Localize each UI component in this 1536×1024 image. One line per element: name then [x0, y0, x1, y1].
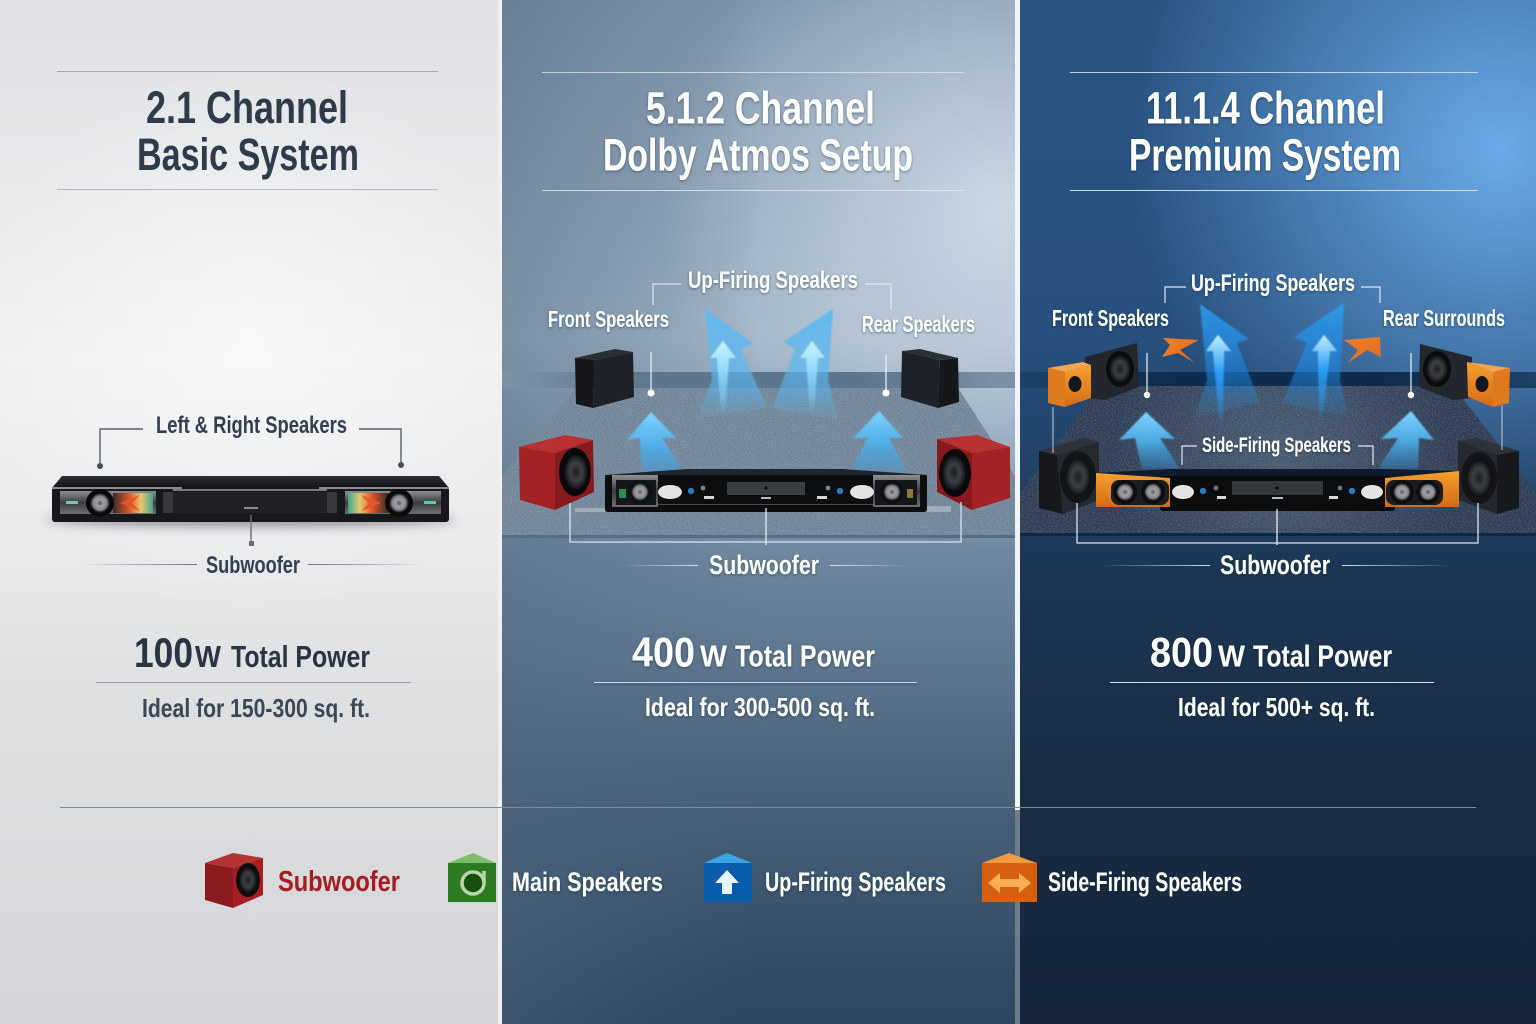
heading: 5.1.2 channel dolby atmos setup: Dolby Atmos Setup — [603, 130, 913, 180]
callout: subwoofer — [1077, 503, 1478, 580]
soundbar: 11.1.4 channel — [1096, 469, 1459, 511]
room floor — [1020, 372, 1536, 536]
legend item: main speakers — [448, 853, 663, 902]
callout: up-firing speakers — [1165, 270, 1380, 303]
stat: 100W total power — [96, 629, 411, 682]
heading: 11.1.4 channel premium system — [1129, 82, 1401, 180]
callout: subwoofer: Subwoofer — [206, 552, 300, 579]
callout: up-firing speakers — [653, 267, 891, 310]
subwoofer: left red — [519, 435, 594, 510]
callout: subwoofer: Subwoofer — [709, 550, 819, 580]
side-firing chevrons — [1162, 337, 1381, 363]
callout: rear speakers — [862, 311, 975, 396]
lower arrows — [627, 411, 907, 477]
heading: 5.1.2 channel dolby atmos setup: 5.1.2 Channel — [646, 82, 875, 134]
text: ideal room size 500+: Ideal for 500+ sq. ft. — [1178, 692, 1375, 722]
stat: 100W total power: W — [195, 639, 222, 674]
legend item: up-firing speakers — [704, 853, 946, 902]
callout: subwoofer — [80, 515, 423, 579]
subwoofer: right dark — [1458, 438, 1519, 514]
speakers: rear right pair — [1419, 344, 1510, 407]
legend item: subwoofer — [205, 853, 400, 908]
stat: 100W total power: 100 — [134, 629, 193, 676]
panel: 2.1 channel basic system — [0, 0, 500, 1024]
subwoofer: left dark — [1039, 438, 1099, 514]
heading: 11.1.4 channel premium system: Premium System — [1129, 130, 1401, 180]
stat: 800W total power: W — [1218, 638, 1246, 674]
heading: 2.1 channel basic system: Basic System — [137, 129, 359, 180]
callout: subwoofer: Subwoofer — [1220, 550, 1330, 580]
room floor — [502, 372, 1015, 538]
legend item: subwoofer: Subwoofer — [278, 866, 400, 898]
stat: 800W total power: Total Power — [1253, 638, 1392, 674]
callout: side-firing speakers — [1182, 434, 1373, 465]
callout: left and right speakers — [97, 412, 404, 469]
callout: rear surrounds — [1383, 305, 1505, 450]
panel: 5.1.2 channel dolby atmos setup — [502, 0, 1015, 1024]
legend — [205, 853, 1242, 908]
speakers: front left pair — [1048, 343, 1139, 407]
callout: front speakers: Front Speakers — [1052, 305, 1169, 331]
callout: front speakers — [1052, 305, 1169, 453]
soundbar: 2.1 channel — [45, 476, 455, 527]
speaker: front left black — [575, 349, 634, 408]
text: ideal room size 150-300: Ideal for 150-300 sq. ft. — [142, 693, 370, 723]
stat: 800W total power — [1110, 628, 1434, 682]
stat: 800W total power: 800 — [1150, 628, 1213, 676]
stat: 400W total power: Total Power — [735, 638, 875, 674]
callout: up-firing speakers: Up-Firing Speakers — [1191, 270, 1355, 297]
heading: 2.1 channel basic system: 2.1 Channel — [146, 82, 348, 133]
legend item: side-firing speakers — [982, 853, 1242, 902]
callout: side-firing speakers: Side-Firing Speakers — [1202, 434, 1351, 457]
callout: front speakers — [548, 306, 669, 396]
heading: 5.1.2 channel dolby atmos setup — [603, 82, 913, 180]
soundbar: 5.1.2 channel — [575, 469, 951, 512]
callout: subwoofer — [570, 502, 961, 580]
legend item: main speakers: Main Speakers — [512, 867, 663, 897]
callout: front speakers: Front Speakers — [548, 306, 669, 332]
text: ideal room size 300-500: Ideal for 300-500 sq. ft. — [645, 692, 875, 722]
up-firing arrows — [698, 309, 838, 420]
stat: 400W total power: 400 — [632, 628, 695, 676]
speaker: rear right black — [901, 349, 959, 408]
heading: 11.1.4 channel premium system: 11.1.4 Channel — [1146, 82, 1385, 134]
panel: 11.1.4 channel premium system — [1020, 0, 1536, 1024]
callout: up-firing speakers: Up-Firing Speakers — [688, 267, 858, 294]
stat: 400W total power: W — [700, 638, 728, 674]
stat: 100W total power: Total Power — [231, 639, 370, 674]
callout: rear speakers: Rear Speakers — [862, 311, 975, 337]
up-firing arrows — [1195, 303, 1348, 430]
lower arrows — [1119, 411, 1434, 469]
heading: 2.1 channel basic system — [137, 82, 359, 180]
legend item: up-firing speakers: Up-Firing Speakers — [765, 867, 946, 897]
legend item: side-firing speakers: Side-Firing Speakers — [1048, 867, 1242, 897]
callout: left and right speakers: Left & Right Speakers — [156, 412, 347, 439]
subwoofer: right red — [937, 435, 1010, 510]
stat: 400W total power — [594, 628, 917, 682]
